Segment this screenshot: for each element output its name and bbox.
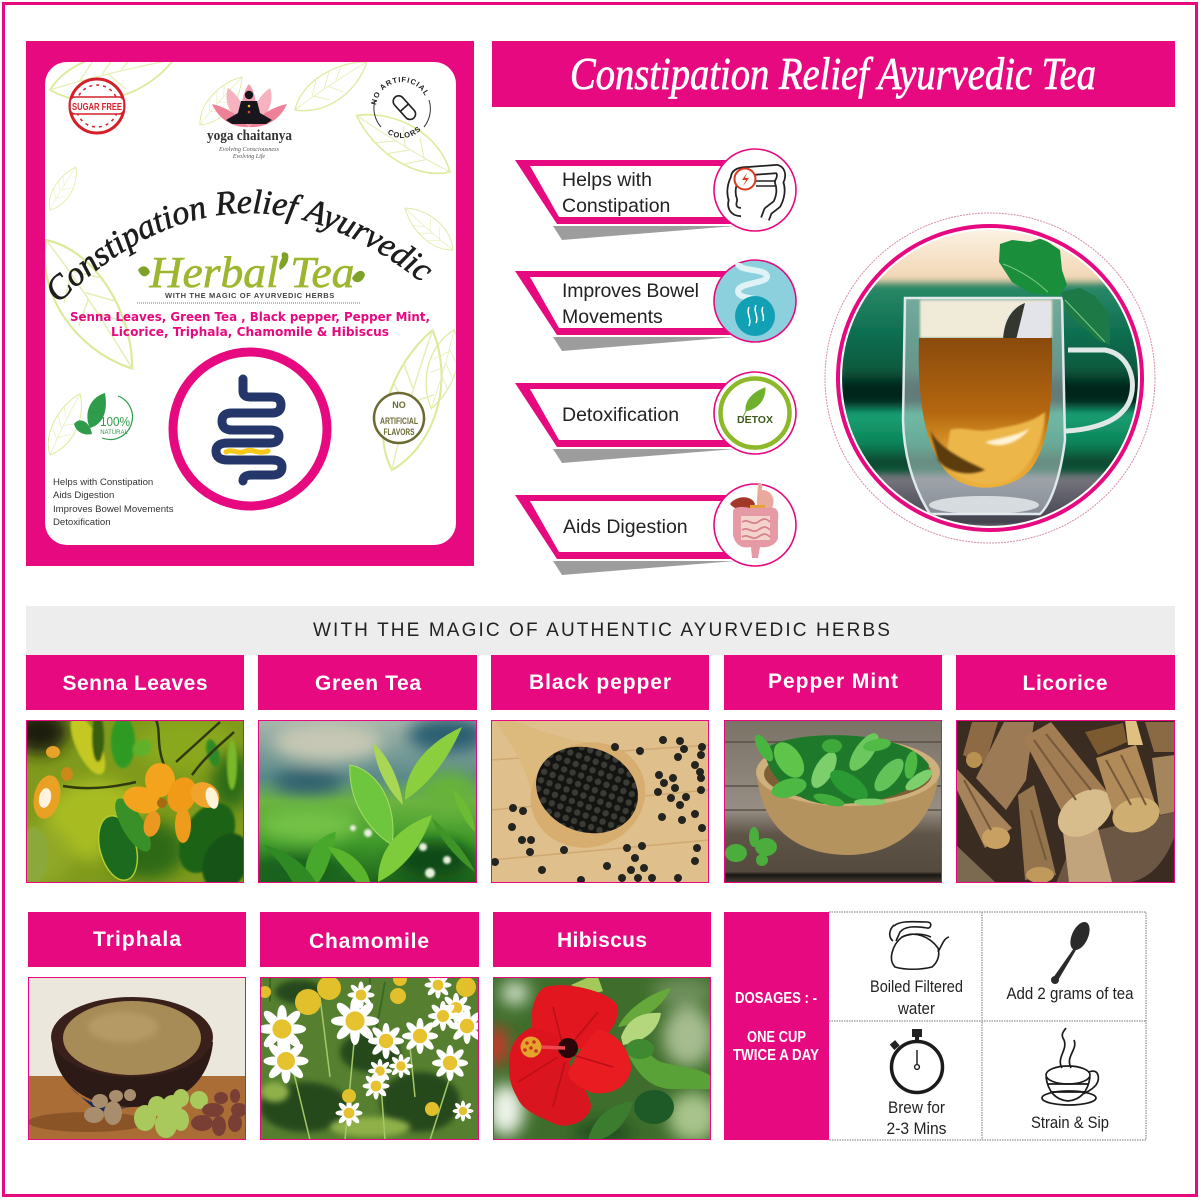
herbs section heading — [26, 606, 1175, 655]
curved heading: Constipation Relief Ayurvedic — [49, 189, 432, 300]
benefit: helps with constipation — [515, 149, 796, 240]
panel: product pack — [26, 41, 474, 566]
mint leaves — [999, 238, 1067, 296]
herb: triphala: Triphala — [93, 928, 181, 951]
benefit: detoxification: Detoxification — [562, 404, 679, 426]
leaf background pattern — [45, 62, 456, 472]
badge: 100% natural: 100% — [100, 414, 130, 429]
herb: licorice — [956, 655, 1175, 883]
step: boiled water: water — [897, 999, 935, 1018]
badge: no artificial flavors: ARTIFICIAL — [380, 416, 418, 426]
step: strain: Strain & Sip — [1031, 1113, 1109, 1132]
badge: no artificial colors: NO ARTIFICIAL — [371, 76, 428, 105]
herb: black pepper: Black pepper — [529, 671, 671, 694]
title banner — [492, 41, 1175, 107]
icon: steaming cup — [1042, 1028, 1098, 1105]
benefit: improves bowel movements: Movements — [562, 306, 663, 328]
step: brew: Brew for — [888, 1098, 945, 1117]
photo: tea mug — [825, 213, 1155, 543]
benefit: improves bowel movements: Improves Bowel — [562, 280, 699, 302]
benefit: aids digestion: Aids Digestion — [563, 516, 688, 538]
ingredient text: Senna Leaves, Green Tea , Black pepper, Pepper Mint, — [70, 309, 430, 324]
icon: stopwatch — [890, 1029, 942, 1092]
panel: dosages — [724, 912, 1146, 1140]
badge: 100% natural — [74, 393, 132, 439]
badge: no artificial flavors — [374, 393, 424, 443]
glass — [903, 298, 1065, 514]
logo: yoga chaitanya: Evolving Consciousness — [218, 147, 280, 153]
pack benefits list: Aids Digestion — [53, 490, 114, 501]
icon: colon — [732, 168, 781, 219]
herb: chamomile — [258, 912, 485, 1140]
step: add tea: Add 2 grams of tea — [1006, 984, 1134, 1003]
herb: senna leaves: Senna Leaves — [62, 672, 208, 695]
subheading: WITH THE MAGIC OF AYURVEDIC HERBS — [165, 291, 335, 300]
panel: dosages: TWICE A DAY — [733, 1047, 819, 1064]
herb: hibiscus: Hibiscus — [557, 929, 647, 952]
badge: no artificial flavors: FLAVORS — [384, 427, 414, 437]
pack benefits list: Helps with Constipation — [53, 477, 153, 488]
pack benefits list: Detoxification — [53, 517, 111, 528]
herbal tea heading: Herbal Tea — [148, 248, 354, 297]
herb: senna leaves — [11, 655, 259, 898]
logo: yoga chaitanya: yoga chaitanya — [207, 128, 292, 144]
benefit: helps with constipation: Helps with — [562, 169, 652, 191]
panel: dosages: ONE CUP — [747, 1029, 806, 1046]
badge: no artificial flavors: NO — [392, 400, 406, 410]
pack benefits list: Improves Bowel Movements — [53, 504, 174, 515]
panel: dosages: DOSAGES : - — [735, 990, 817, 1007]
badge: sugar free: SUGAR FREE — [72, 102, 122, 113]
icon: detox: DETOX — [737, 414, 773, 426]
logo: yoga chaitanya — [207, 84, 292, 160]
herb: green tea: Green Tea — [315, 672, 421, 695]
benefit: improves bowel movements — [515, 260, 796, 351]
ingredient text — [70, 309, 430, 339]
icon: detox — [720, 378, 790, 448]
benefit: aids digestion — [515, 484, 796, 575]
badge: 100% natural: NATURAL — [100, 430, 128, 436]
badge: no artificial colors — [371, 76, 431, 138]
badge: sugar free — [70, 79, 124, 133]
ingredient text: Licorice, Triphala, Chamomile & Hibiscus — [111, 324, 389, 339]
step: brew — [886, 1098, 946, 1138]
herb: hibiscus — [487, 912, 718, 1142]
icon: digestive system — [730, 484, 778, 558]
step: brew: 2-3 Mins — [886, 1119, 946, 1138]
badge: no artificial colors: COLORS — [388, 126, 420, 138]
icon: spoon — [1051, 919, 1094, 984]
pack benefits list — [53, 477, 174, 528]
herb: licorice: Licorice — [1022, 672, 1108, 695]
herb: triphala — [28, 912, 247, 1140]
herb: green tea — [248, 655, 488, 884]
herb: black pepper — [491, 655, 709, 883]
herb: chamomile: Chamomile — [309, 930, 429, 953]
icon: intestine in ring — [173, 352, 327, 506]
herb: pepper mint — [724, 655, 942, 883]
title banner: Constipation Relief Ayurvedic Tea — [570, 48, 1096, 99]
logo: yoga chaitanya: Evolving Life — [232, 153, 265, 160]
icon: bowel movement — [735, 263, 775, 336]
herb: pepper mint: Pepper Mint — [768, 670, 898, 693]
herbs section heading: WITH THE MAGIC OF AUTHENTIC AYURVEDIC HERBS — [313, 620, 890, 641]
step: boiled water — [870, 977, 963, 1018]
benefit: helps with constipation: Constipation — [562, 195, 670, 217]
benefit: detoxification — [515, 372, 796, 463]
step: boiled water: Boiled Filtered — [870, 977, 963, 996]
icon: kettle — [890, 922, 949, 969]
